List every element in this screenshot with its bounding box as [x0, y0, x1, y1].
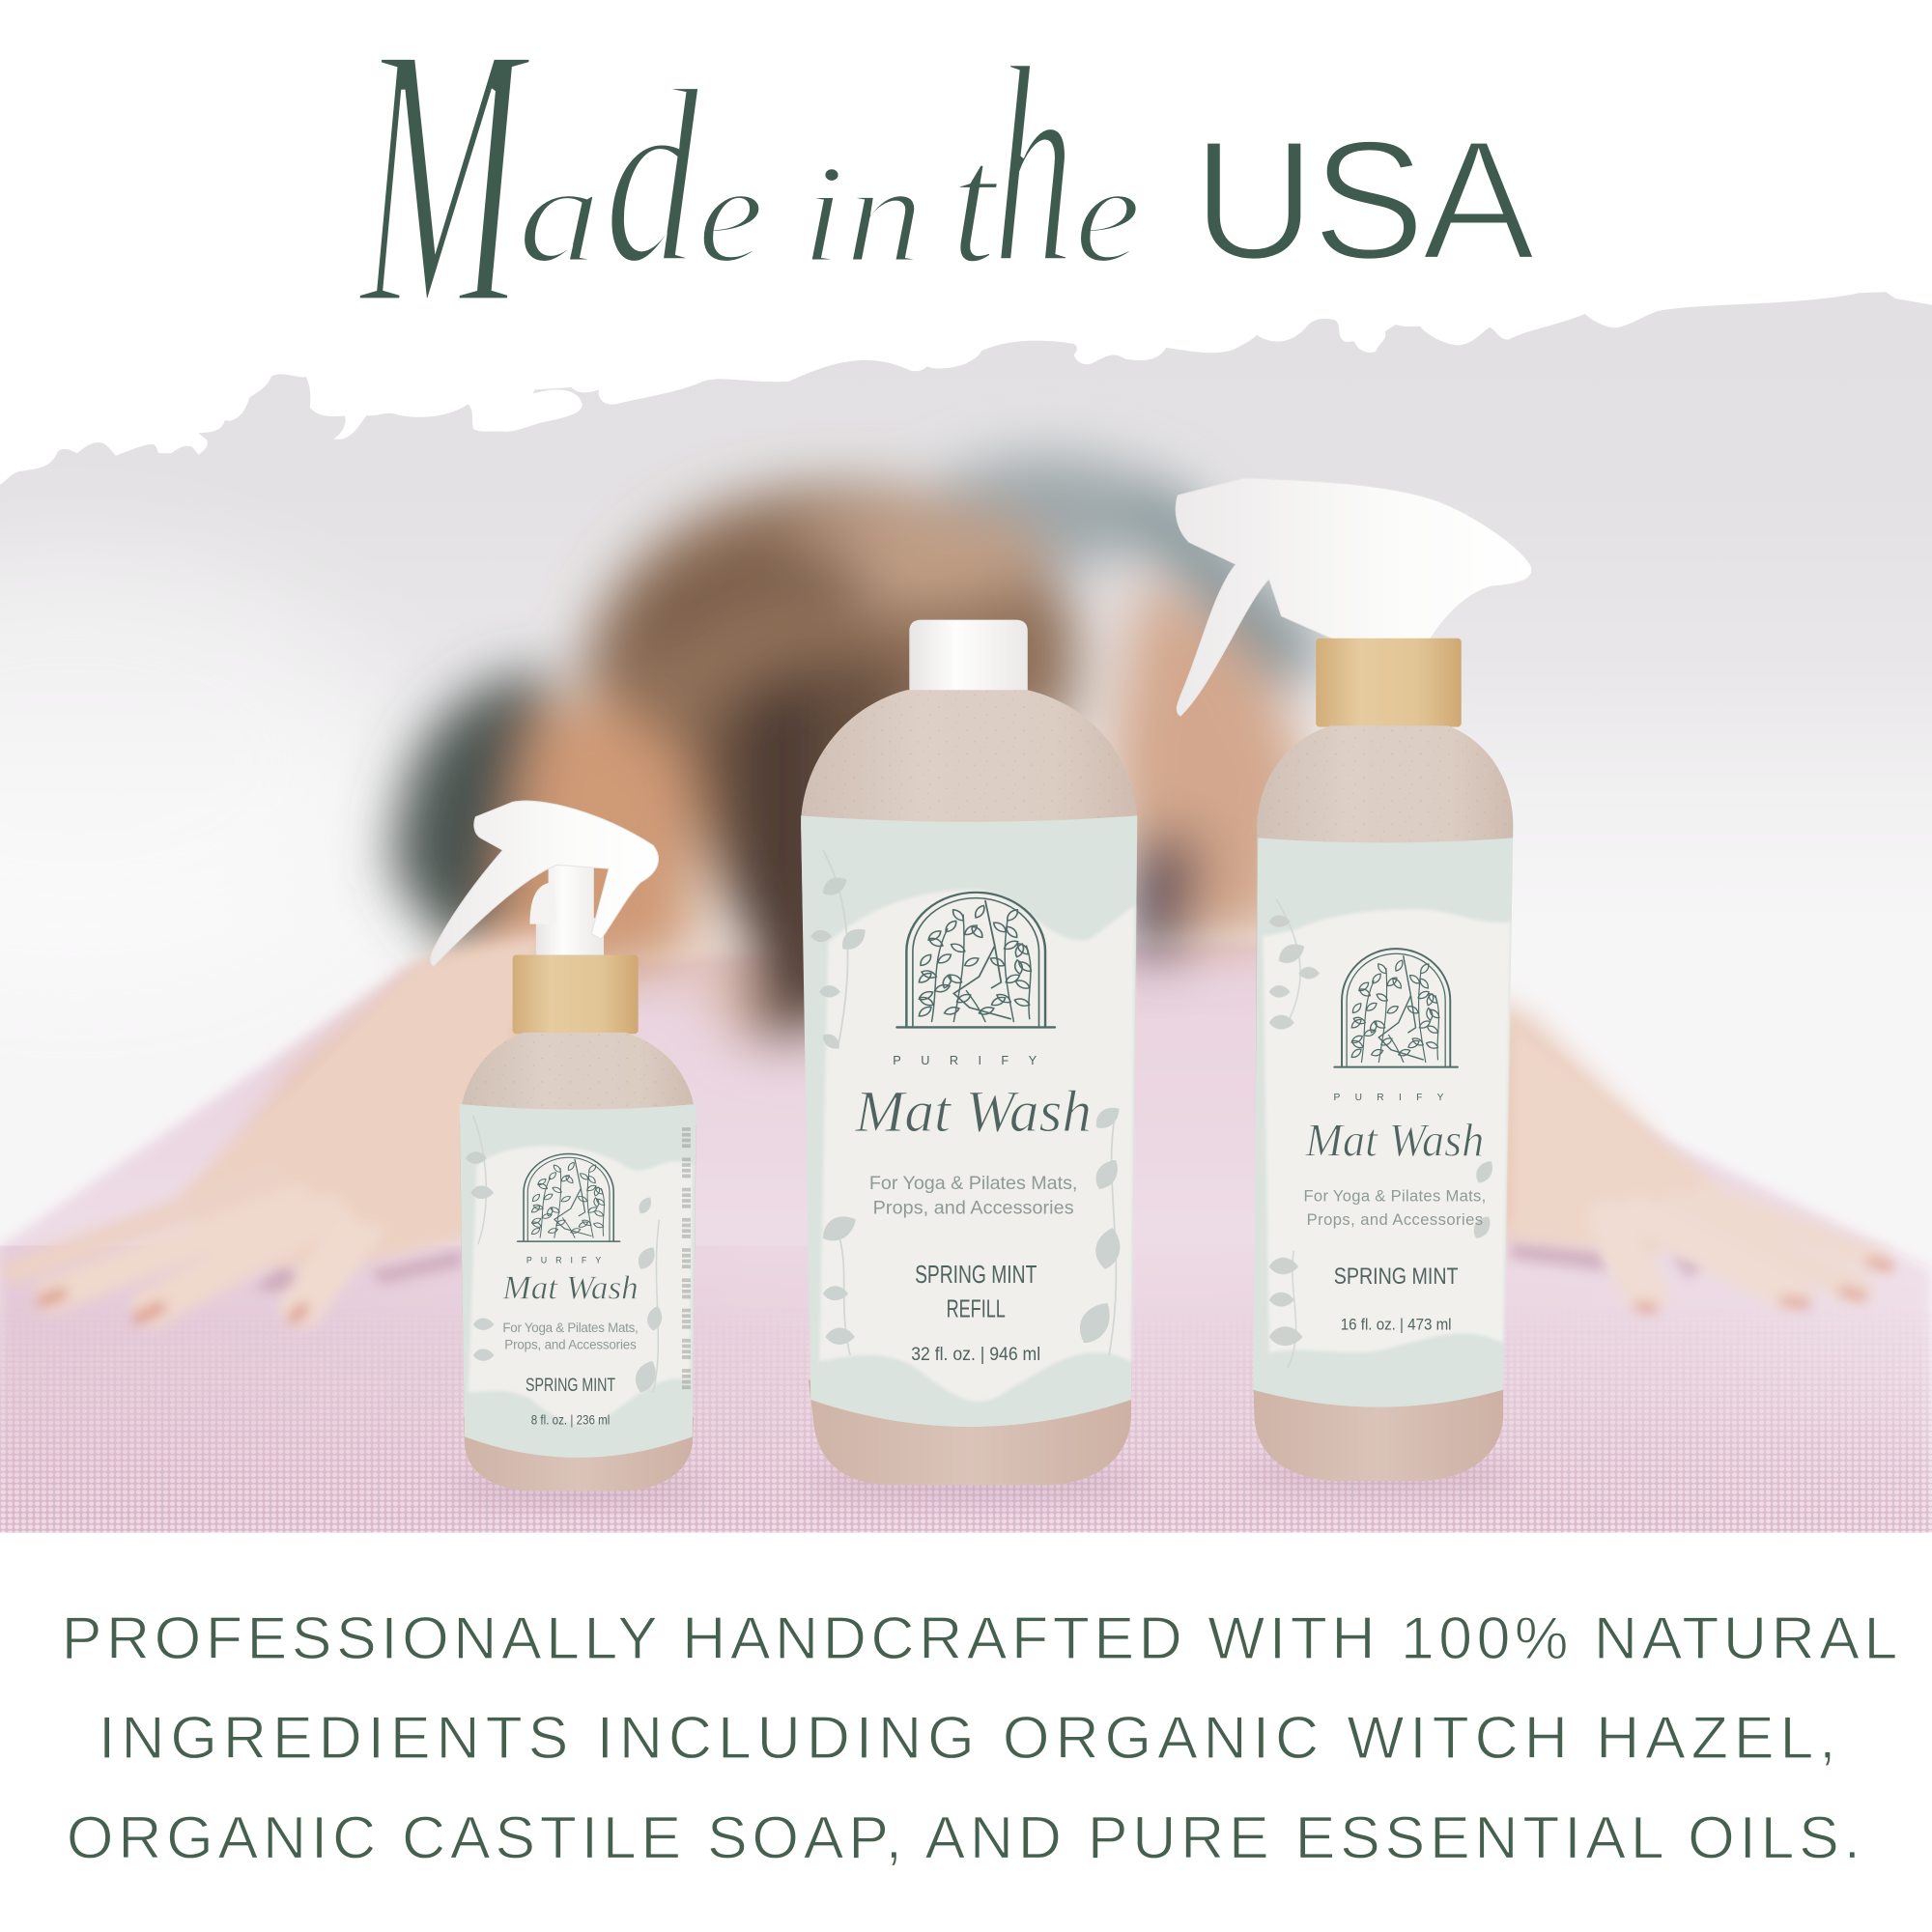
large label text: Props, and Accessories — [873, 1197, 1074, 1218]
medium logo — [1334, 949, 1458, 1067]
small logo — [518, 1153, 620, 1241]
small label text: 8 fl. oz. | 236 ml — [531, 1412, 610, 1427]
large label text — [854, 1053, 1092, 1365]
title script: Made in the: h — [993, 7, 1074, 324]
large label text: Mat Wash — [854, 1079, 1092, 1145]
large label — [801, 815, 1137, 1427]
small trigger sprayer — [431, 801, 659, 966]
blurred person — [394, 456, 1309, 1047]
title script: Made in the: a — [518, 134, 601, 292]
title script: Made in the: e — [697, 134, 764, 292]
medium label text: Props, and Accessories — [1307, 1210, 1483, 1229]
medium label text: For Yoga & Pilates Mats, — [1303, 1187, 1486, 1206]
medium label text: 16 fl. oz. | 473 ml — [1341, 1315, 1452, 1333]
small bamboo collar — [513, 955, 639, 1034]
bottom tagline — [62, 1605, 1897, 1871]
small bottle body — [460, 1033, 696, 1491]
large label text: SPRING MINT — [915, 1262, 1037, 1289]
tagline line 3: ORGANIC CASTILE SOAP, AND PURE ESSENTIAL OILS. — [67, 1804, 1861, 1871]
medium trigger sprayer — [1176, 478, 1532, 716]
title script: Made in the: d — [604, 36, 703, 316]
medium bottle body — [1253, 725, 1513, 1481]
title script: Made in the: in — [801, 134, 924, 292]
medium label — [1253, 838, 1513, 1407]
large white cap — [909, 620, 1028, 693]
wall backdrop — [0, 292, 1932, 1262]
bottle shadows on mat — [450, 1463, 1516, 1501]
large logo — [897, 893, 1055, 1027]
small label text: PURIFY — [526, 1255, 610, 1264]
bottle: medium 16 fl oz spray — [1176, 478, 1532, 1481]
large label text: PURIFY — [893, 1053, 1057, 1067]
large label text: For Yoga & Pilates Mats, — [869, 1173, 1077, 1194]
tagline line 1: PROFESSIONALLY HANDCRAFTED WITH 100% NATURAL — [62, 1605, 1897, 1672]
medium label text: PURIFY — [1334, 1093, 1459, 1103]
large label text: 32 fl. oz. | 946 ml — [911, 1345, 1040, 1365]
photo: blurred yoga scene — [0, 246, 1932, 1533]
right hand — [1511, 1021, 1890, 1309]
title — [356, 0, 1536, 384]
tagline line 2: INGREDIENTS INCLUDING ORGANIC WITCH HAZEL, — [99, 1704, 1836, 1772]
medium bamboo collar — [1316, 639, 1462, 727]
torn paper edge — [0, 0, 1932, 485]
small label text: Props, and Accessories — [504, 1338, 637, 1352]
title script: Made in the — [356, 0, 1141, 384]
medium label text — [1303, 1093, 1486, 1333]
bottle: small 8 fl oz spray — [431, 801, 696, 1491]
hand shadows on mat — [252, 1242, 1707, 1296]
yoga mat — [0, 941, 1932, 1533]
title script: Made in the: t — [952, 107, 1000, 298]
medium label text: Mat Wash — [1304, 1115, 1484, 1166]
small label — [460, 1104, 696, 1458]
small label text: SPRING MINT — [526, 1376, 615, 1396]
small label text: For Yoga & Pilates Mats, — [502, 1321, 639, 1335]
large label text: REFILL — [947, 1296, 1006, 1323]
medium label text: SPRING MINT — [1334, 1264, 1459, 1290]
small label text: Mat Wash — [501, 1269, 639, 1306]
bottle: large 32 fl oz refill — [801, 620, 1137, 1485]
title script: Made in the: e — [1074, 134, 1141, 292]
title: USA: USA — [1193, 106, 1536, 296]
left hand — [14, 936, 542, 1319]
small label text — [501, 1255, 639, 1427]
large bottle body — [801, 690, 1137, 1485]
arms — [222, 918, 1651, 1233]
